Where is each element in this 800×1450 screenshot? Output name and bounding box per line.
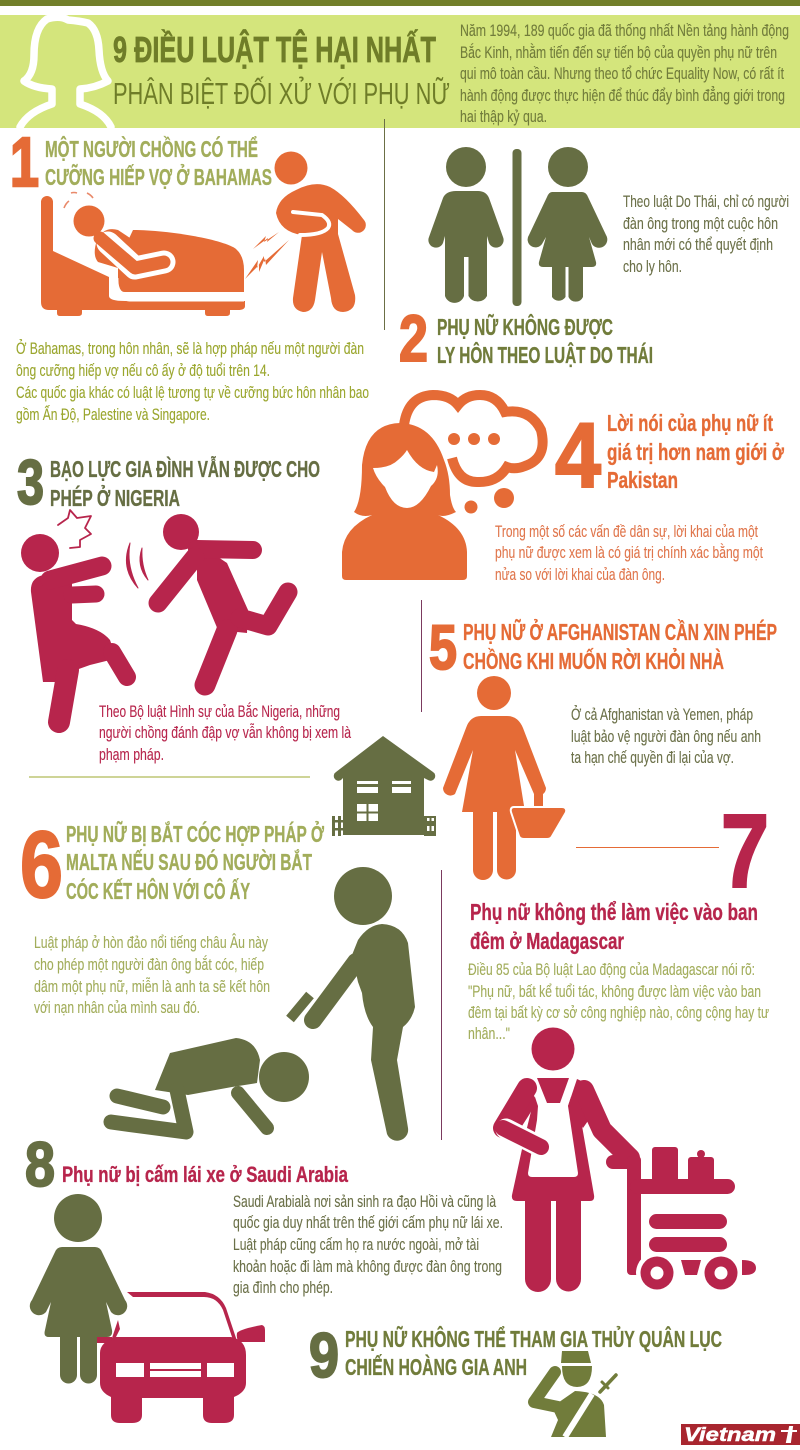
heading 6: MALTA NẾU SAU ĐÓ NGƯỜI BẮT [66,848,312,875]
heading 1: MỘT NGƯỜI CHỒNG CÓ THỂ [45,135,258,162]
panel: law 8 [25,1130,503,1423]
number 2: 2 [399,301,428,375]
body text 3: Theo Bộ luật Hình sự của Bắc Nigeria, những [99,702,340,721]
header panel [0,15,800,128]
panel: law 1 [10,123,369,424]
body text 3 [99,702,352,764]
icon: car [97,1292,265,1423]
body text 8 [233,1193,503,1297]
panel: law 7 [468,794,769,1294]
heading 3: PHÉP Ở NIGERIA [50,483,180,511]
body text 6 [34,933,270,1017]
icon: man and woman with divider [428,147,607,306]
body text 7 [468,961,769,1043]
body text 6: dâm một phụ nữ, miễn là anh ta sẽ kết hôn [34,977,270,996]
panel: law 4 [342,395,784,584]
heading 7: đêm ở Madagascar [470,928,624,954]
icon: woman with trolley [503,1028,756,1294]
heading 2: LY HÔN THEO LUẬT DO THÁI [437,341,653,368]
body text 2 [623,193,789,276]
body text 1: gồm Ấn Độ, Palestine và Singapore. [16,405,210,424]
icon: gunman and crawling victim [111,867,415,1141]
body text 4: nửa so với lời khai của đàn ông. [495,566,665,584]
title: 9 ĐIỀU LUẬT TỆ HẠI NHẤT [113,28,436,70]
header band [0,15,800,128]
body text 5 [571,705,761,767]
body text 1 [16,339,369,424]
heading 1: CƯỠNG HIẾP VỢ Ở BAHAMAS [45,162,272,190]
heading 6: CÓC KẾT HÔN VỚI CÔ ẤY [66,877,250,904]
heading 2: PHỤ NỮ KHÔNG ĐƯỢC [437,313,613,340]
intro text [460,22,789,126]
icon: woman silhouette outline [20,17,111,127]
top bar [0,0,800,6]
heading 4: Pakistan [607,467,678,493]
icon: saluting soldier [534,1351,616,1437]
body text 8: Saudi Arabialà nơi sản sinh ra đạo Hồi và cũng là [233,1193,497,1211]
heading 9 [345,1324,722,1380]
heading 2 [437,313,653,368]
number 1: 1 [10,123,39,201]
panel: law 3 [17,448,352,764]
body text 8: gia đình cho phép. [233,1279,333,1297]
heading 9: CHIẾN HOÀNG GIA ANH [345,1353,527,1380]
icon: woman with thought bubble [342,395,543,580]
heading 3: BẠO LỰC GIA ĐÌNH VẪN ĐƯỢC CHO [50,454,320,482]
body text 6: với nạn nhân của mình sau đó. [34,999,200,1017]
heading 7 [470,899,758,954]
heading 4 [607,410,784,493]
body text 1: ông cưỡng hiếp vợ nếu cô ấy ở độ tuổi trên 14. [16,362,270,380]
intro text: hai thập kỷ qua. [460,108,547,126]
body text 8: khoản hoặc đi làm mà không được đàn ông trong [233,1258,502,1276]
heading 6: PHỤ NỮ BỊ BẮT CÓC HỢP PHÁP Ở [66,819,324,847]
number 3: 3 [17,448,44,518]
heading 8: Phụ nữ bị cấm lái xe ở Saudi Arabia [62,1162,349,1187]
title: PHÂN BIỆT ĐỐI XỬ VỚI PHỤ NỮ [113,75,450,111]
heading 3 [50,454,320,511]
panel: law 9 [309,1321,722,1437]
body text 6: cho phép một người đàn ông bắt cóc, hiếp [34,955,264,974]
heading 1 [45,135,272,190]
icon: man hitting woman [21,510,288,722]
icon: woman with basket [443,676,565,880]
title [113,28,450,111]
body text 3: người chồng đánh đập vợ vẫn không bị xem là [99,723,352,742]
icon: woman [30,1194,127,1384]
body text 7: nhân..." [468,1025,510,1043]
body text 4 [495,523,763,584]
icon: woman in bed and man [41,152,366,316]
number 9: 9 [309,1321,339,1391]
number 7: 7 [721,794,769,910]
body text 8: Luật pháp cũng cấm họ ra nước ngoài, mở tài [233,1236,479,1254]
body text 6: Luật pháp ở hòn đảo nổi tiếng châu Âu này [34,933,269,952]
body text 5: ta hạn chế quyền đi lại của vợ. [571,749,734,767]
logo: Vietnam+: Vietnam [684,1425,776,1446]
panel: law 6 [20,812,415,1141]
panel: law 5 [429,613,777,880]
logo: Vietnam+ [681,1424,800,1446]
number 6: 6 [20,812,63,918]
panel: law 2 [399,147,789,375]
body text 3: phạm pháp. [99,746,164,764]
body text 1: Ở Bahamas, trong hôn nhân, sẽ là hợp pháp nếu một người đàn [16,339,364,358]
icon: house [332,736,436,836]
body text 1: Các quốc gia khác có luật lệ tương tự về cưỡng bức hôn nhân bao [16,384,369,402]
heading 6 [66,819,324,904]
body text 8: quốc gia duy nhất trên thế giới cấm phụ nữ lái xe. [233,1214,503,1232]
number 4: 4 [555,405,601,507]
body text 2: cho ly hôn. [623,258,682,276]
number 8: 8 [25,1130,55,1200]
heading 5 [463,617,777,674]
number 5: 5 [429,613,457,683]
